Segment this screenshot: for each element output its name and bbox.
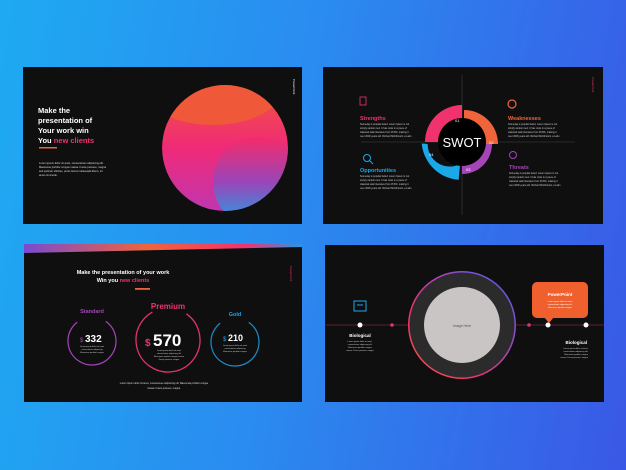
premium xyxy=(123,295,213,385)
right item: massa. Fusce posuere, magna xyxy=(561,357,589,359)
weaknesses: simply random text. It has roots in a piece of xyxy=(508,127,555,130)
threats: Someday is popular belief, Lorem Ipsum is not xyxy=(509,172,559,175)
standard: 332 xyxy=(85,334,102,345)
gold xyxy=(202,309,268,375)
gold: Gold xyxy=(229,312,241,318)
strengths: Strengths xyxy=(360,116,386,122)
icon: presentation xyxy=(354,301,366,311)
slide 1: intro xyxy=(23,67,302,224)
premium: Lorem ipsum dolor sit amet xyxy=(157,349,182,352)
heading xyxy=(77,270,170,284)
threats: simply random text. It has roots in a piece of xyxy=(509,176,556,179)
right item: Lorem ipsum dolor sit amet, xyxy=(563,347,588,350)
opportunities: classical Latin literature from 45 BC, making it xyxy=(360,183,409,186)
strengths: simply random text. It has roots in a piece of xyxy=(360,127,407,130)
premium: Fusce posuere, magna xyxy=(159,359,180,361)
SWOT ring: 02 xyxy=(489,140,494,145)
SWOT ring: 04 xyxy=(429,152,434,157)
threats: over 2000 years old. Richard McClintock, a Latin xyxy=(509,184,561,187)
callout: consectetuer adipiscing elit. xyxy=(548,303,573,306)
right item: consectetuer adipiscing elit. xyxy=(563,350,588,353)
SWOT ring: 03 xyxy=(466,167,471,172)
gold: Lorem ipsum dolor sit amet xyxy=(223,344,248,347)
slide 3: pricing xyxy=(24,244,302,402)
callout xyxy=(532,282,588,323)
paragraph: amet commodo. xyxy=(39,173,58,177)
standard xyxy=(59,308,125,374)
premium: consectetuer adipiscing elit xyxy=(157,352,181,355)
weaknesses: classical Latin literature from 45 BC, making it xyxy=(508,131,557,134)
callout: Maecenas porttitor congue xyxy=(548,306,573,309)
SWOT ring xyxy=(419,105,498,180)
threats: Threats xyxy=(509,165,529,171)
heading xyxy=(38,106,94,145)
heading: Make the xyxy=(38,106,70,115)
central image ring xyxy=(408,271,516,379)
top band xyxy=(24,244,302,253)
opportunities xyxy=(360,154,412,190)
standard: Maecenas porttitor congue xyxy=(80,351,105,354)
left item xyxy=(346,333,375,352)
slide 2: SWOT xyxy=(323,67,603,224)
footer text xyxy=(120,382,209,390)
opportunities: simply random text. It has roots in a piece of xyxy=(360,179,407,182)
opportunities: Opportunities xyxy=(360,168,396,174)
left item: massa. Fusce posuere, magna xyxy=(346,350,375,352)
strengths: classical Latin literature from 45 BC, making it xyxy=(360,131,409,134)
weaknesses xyxy=(508,100,560,138)
footer text: massa. Fusce posuere, magna. xyxy=(147,387,181,390)
slide 2: SWOT: PowerPoint xyxy=(591,77,595,93)
central image ring: Image Here xyxy=(453,324,471,328)
paragraph: sed pulvinar ultricies, purus lectus malesuada libero, sit xyxy=(39,169,103,173)
left item: Maecenas porttitor congue xyxy=(348,346,373,349)
slide 3: pricing: PowerPoint xyxy=(289,266,293,282)
threats xyxy=(509,152,561,187)
standard: consectetuer adipiscing xyxy=(82,348,102,351)
heading: You new clients xyxy=(38,136,94,145)
footer text: Lorem ipsum dolor sit amet, consectetuer adipiscing elit. Maecenas porttitor congue xyxy=(120,382,209,385)
callout: Lorem ipsum dolor sit amet, xyxy=(548,300,573,303)
paragraph: Lorem ipsum dolor sit amet, consectetuer adipiscing elit. xyxy=(39,161,104,165)
right item xyxy=(561,340,589,359)
right item: Maecenas porttitor congue xyxy=(564,353,589,356)
premium: Maecenas porttitor congue massa xyxy=(154,355,185,358)
heading: presentation of xyxy=(38,116,93,125)
opportunities: over 2000 years old. Richard McClintock, a Latin xyxy=(360,187,412,190)
weaknesses: Weaknesses xyxy=(508,116,541,122)
heading: Win you new clients xyxy=(97,278,149,284)
paragraph xyxy=(39,161,107,177)
standard: $ xyxy=(80,338,84,344)
standard: Standard xyxy=(80,309,104,315)
SWOT ring: SWOT xyxy=(442,135,482,150)
vertical label: PowerPoint xyxy=(292,79,296,95)
strengths xyxy=(360,97,412,138)
right item: Biological xyxy=(565,340,587,345)
slide 4: timeline xyxy=(325,245,604,402)
premium: 570 xyxy=(153,331,181,350)
premium: $ xyxy=(145,338,151,349)
gradient sphere xyxy=(162,85,288,211)
gold: consectetuer adipiscing xyxy=(225,347,245,350)
opportunities: Someday is popular belief, Lorem Ipsum is not xyxy=(360,175,410,178)
callout: PowerPoint xyxy=(548,292,573,297)
strengths: over 2000 years old. Richard McClintock, a Latin xyxy=(360,135,412,138)
premium: Premium xyxy=(151,302,185,311)
gold: 210 xyxy=(228,333,243,343)
heading: Make the presentation of your work xyxy=(77,270,170,276)
left item: Biological xyxy=(349,333,371,338)
threats: classical Latin literature from 45 BC, making it xyxy=(509,180,558,183)
weaknesses: over 2000 years old. Richard McClintock, a Latin xyxy=(508,135,560,138)
weaknesses: Someday is popular belief, Lorem Ipsum is not xyxy=(508,123,558,126)
standard: Lorem ipsum dolor sit amet xyxy=(80,345,105,348)
paragraph: Maecenas porttitor congue massa. Fusce posuere, magna xyxy=(39,165,107,169)
gold: Maecenas porttitor congue xyxy=(223,350,248,353)
timeline dots xyxy=(358,322,588,328)
heading: Your work win xyxy=(38,126,89,135)
left item: Lorem ipsum dolor sit amet, xyxy=(348,340,373,343)
SWOT ring: 01 xyxy=(455,118,460,123)
gold: $ xyxy=(223,337,227,343)
strengths: Someday is popular belief, Lorem Ipsum is not xyxy=(360,123,410,126)
left item: consectetuer adipiscing elit. xyxy=(348,343,373,346)
